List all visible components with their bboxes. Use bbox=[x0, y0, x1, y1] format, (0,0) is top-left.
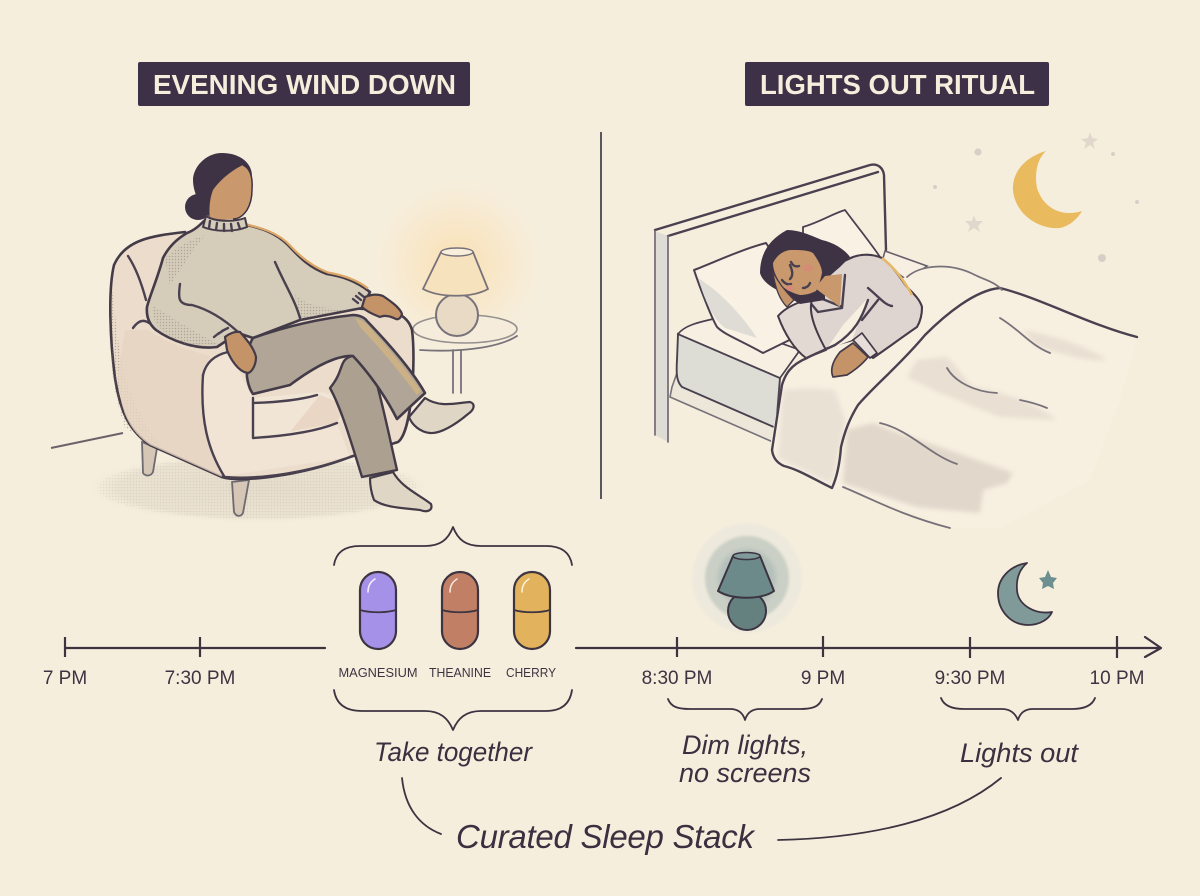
neck bbox=[815, 274, 842, 307]
supplement stack bbox=[334, 527, 572, 767]
armchair bbox=[110, 232, 413, 479]
pajama details bbox=[808, 275, 892, 320]
capsule labels: CHERRY bbox=[506, 666, 557, 680]
trouser highlight bbox=[355, 318, 421, 395]
divider between scenes bbox=[600, 132, 602, 499]
heading: Evening Wind Down: EVENING WIND DOWN bbox=[153, 69, 456, 100]
chair legs bbox=[142, 442, 249, 516]
blanket bbox=[771, 266, 1137, 528]
time labels: 7:30 PM bbox=[165, 668, 235, 689]
moon bbox=[1013, 151, 1082, 228]
woman: right hand bbox=[362, 295, 402, 319]
time labels: 9:30 PM bbox=[935, 668, 1005, 689]
timeline axis bbox=[65, 637, 1161, 657]
top brace bbox=[334, 527, 572, 565]
pajama shoulder tint bbox=[882, 258, 912, 295]
time labels: 8:30 PM bbox=[642, 668, 712, 689]
moon and star icon bbox=[998, 563, 1057, 625]
callout: curated sleep stack bbox=[402, 778, 1001, 855]
woman: left hand bbox=[225, 332, 256, 373]
capsule: cherry bbox=[514, 572, 550, 649]
woman: upper leg bbox=[247, 315, 425, 419]
capsule labels: THEANINE bbox=[429, 666, 491, 680]
note: lights out bbox=[941, 698, 1095, 768]
woman: sweater bbox=[147, 218, 370, 348]
capsule labels: MAGNESIUM bbox=[338, 666, 418, 680]
blanket fold edges bbox=[772, 267, 1137, 528]
timeline ticks bbox=[65, 636, 1117, 658]
stars and dots bbox=[933, 132, 1139, 262]
note: dim lights: no screens bbox=[679, 758, 811, 788]
dim lamp icon bbox=[692, 523, 802, 633]
woman: hair bbox=[760, 230, 850, 304]
illustration: sleeping woman in bed bbox=[655, 132, 1139, 528]
hand under head bbox=[773, 272, 794, 307]
woman: raised foot bbox=[409, 398, 474, 433]
note text: Dim lights, bbox=[682, 730, 808, 760]
woman: face bbox=[773, 250, 842, 307]
right pillow bbox=[803, 210, 880, 270]
heading: Lights Out Ritual: LIGHTS OUT RITUAL bbox=[760, 69, 1035, 100]
sweater shading and details bbox=[152, 224, 368, 347]
headboard bbox=[655, 165, 886, 442]
time labels: 7 PM bbox=[43, 668, 87, 689]
blanket wedge near chest bbox=[806, 298, 868, 358]
heading: Lights Out Ritual bbox=[745, 62, 1049, 106]
illustration: woman in armchair with lamp bbox=[51, 153, 557, 524]
note text: Lights out bbox=[960, 738, 1079, 768]
mattress and frame bbox=[670, 319, 800, 442]
connector left bbox=[402, 778, 441, 834]
woman: sleeve arm bbox=[778, 300, 826, 358]
woman: forearm cuff and hand bbox=[832, 333, 877, 377]
connector right bbox=[778, 778, 1001, 840]
callout text: Curated Sleep Stack bbox=[456, 818, 756, 855]
time labels: 10 PM bbox=[1090, 668, 1144, 689]
lamp glow bbox=[357, 164, 557, 364]
time labels: 9 PM bbox=[801, 668, 845, 689]
woman: pajama body bbox=[788, 255, 922, 358]
table lamp bbox=[423, 248, 488, 336]
brace bbox=[941, 698, 1095, 720]
capsule: magnesium bbox=[360, 572, 396, 649]
time labels bbox=[43, 668, 1144, 689]
left pillow bbox=[694, 243, 820, 353]
woman: lower leg bbox=[330, 356, 397, 477]
bottom brace bbox=[334, 690, 572, 730]
woman: lower foot bbox=[370, 472, 431, 511]
brace bbox=[668, 699, 822, 720]
woman: head and hair bbox=[185, 153, 252, 231]
side table bbox=[413, 315, 517, 393]
timeline bbox=[43, 636, 1161, 689]
heading: Evening Wind Down bbox=[138, 62, 470, 106]
floor line and shadow bbox=[51, 433, 434, 524]
capsule labels bbox=[338, 666, 557, 680]
note: dim lights bbox=[668, 699, 822, 788]
collar bbox=[203, 216, 247, 231]
bed back panel bbox=[882, 251, 927, 280]
capsule: theanine bbox=[442, 572, 478, 649]
note: take together: Take together bbox=[374, 737, 533, 767]
